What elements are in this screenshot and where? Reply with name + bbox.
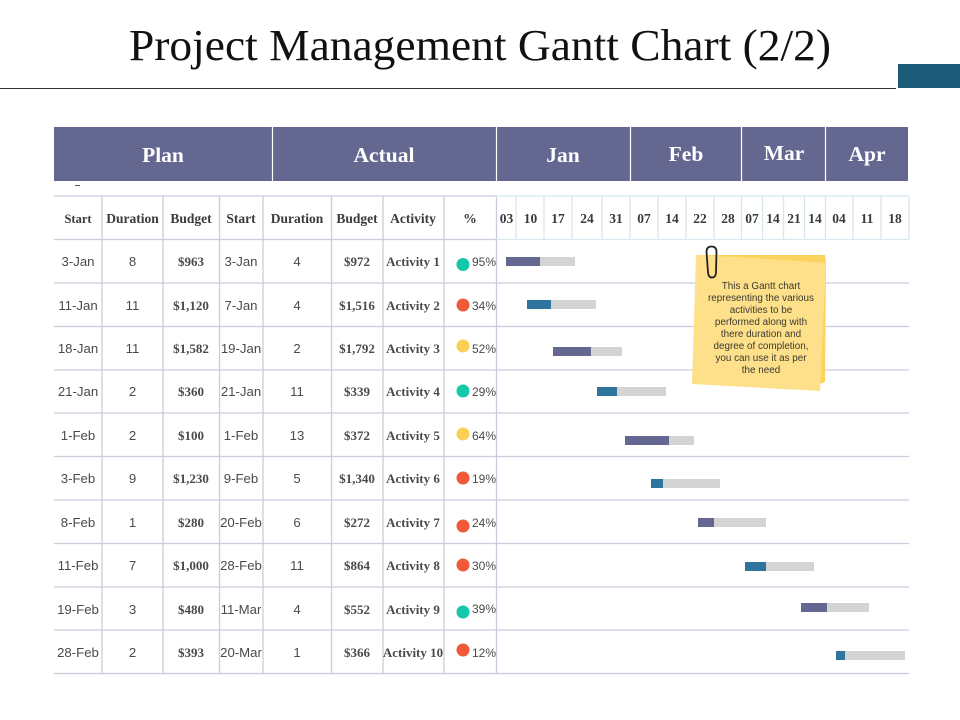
row: Activity 5: Activity 5 (386, 428, 440, 443)
table grid lines (54, 196, 909, 674)
sticky note callout: performed along with (715, 317, 807, 328)
row: Activity 10 (57, 644, 905, 660)
table header band: Actual (354, 143, 414, 167)
sticky note callout: representing the various (708, 293, 814, 304)
row: Activity 8 (58, 558, 814, 573)
row: Activity 9: 39% (472, 602, 496, 616)
row: Activity 2: Activity 2 (386, 298, 440, 313)
row: Activity 10: $366 (344, 645, 370, 660)
row: Activity 9: 19-Feb (57, 602, 99, 617)
row: Activity 9: 11-Mar (221, 602, 262, 617)
row: Activity 9: 4 (293, 602, 301, 617)
column headings: Budget (170, 211, 212, 226)
row: Activity 4: 29% (472, 385, 496, 399)
icon: paper clip (706, 246, 716, 278)
timeline date headings: 24 (580, 211, 594, 226)
timeline date headings: 07 (637, 211, 651, 226)
row: Activity 2: 7-Jan (224, 298, 258, 313)
row: Activity 9 (57, 602, 869, 618)
row: Activity 3: $1,582 (173, 341, 209, 356)
row: Activity 7: 1 (129, 515, 136, 530)
timeline date headings: 14 (665, 211, 679, 226)
row: Activity 8: Activity 8 (386, 558, 440, 573)
timeline date headings: 18 (888, 211, 902, 226)
row: Activity 3: 52% (472, 342, 496, 356)
column headings: % (463, 211, 477, 226)
timeline date headings: 04 (832, 211, 846, 226)
row: Activity 6: Activity 6 (386, 471, 440, 486)
row: Activity 4: 11 (290, 384, 304, 399)
row: Activity 6 (61, 471, 720, 488)
row: Activity 1: Activity 1 (386, 254, 440, 269)
column headings: Duration (106, 211, 159, 226)
row: Activity 8: 11 (290, 558, 304, 573)
sticky note callout: there duration and (721, 329, 801, 340)
row: Activity 3: $1,792 (339, 341, 375, 356)
row: Activity 2: 11 (126, 298, 139, 313)
sticky note callout: degree of completion, (714, 341, 808, 352)
row: Activity 1: 8 (129, 254, 136, 269)
row: Activity 8: 11-Feb (58, 558, 98, 573)
column headings: Activity (390, 211, 436, 226)
title: Project Management Gantt Chart (2/2) (129, 21, 831, 70)
column headings: Start (64, 212, 92, 226)
timeline date headings: 03 (500, 211, 514, 226)
row: Activity 6: 5 (293, 471, 301, 486)
row: Activity 5: 1-Feb (224, 428, 258, 443)
row: Activity 7: Activity 7 (386, 515, 440, 530)
row: Activity 2: $1,120 (173, 298, 209, 313)
row: Activity 4 (58, 384, 666, 399)
row: Activity 9: $552 (344, 602, 370, 617)
row: Activity 5: 1-Feb (61, 428, 95, 443)
column headings: Budget (336, 211, 378, 226)
timeline date headings (500, 211, 902, 226)
row: Activity 10: Activity 10 (383, 645, 443, 660)
row: Activity 10: $393 (178, 645, 204, 660)
row: Activity 10: 12% (472, 646, 496, 660)
row: Activity 1: 3-Jan (62, 254, 94, 269)
row: Activity 4: Activity 4 (386, 384, 440, 399)
timeline date headings: 07 (745, 211, 759, 226)
column headings (64, 211, 477, 226)
sticky note callout: activities to be (730, 305, 793, 316)
row: Activity 2: 4 (293, 298, 301, 313)
row: Activity 1 (62, 254, 575, 271)
column headings: Start (226, 211, 256, 226)
row: Activity 5: 64% (472, 429, 496, 443)
row: Activity 4: $339 (344, 384, 370, 399)
row: Activity 4: $360 (178, 384, 204, 399)
column headings: Duration (271, 211, 324, 226)
row: Activity 3: Activity 3 (386, 341, 440, 356)
table header band: Feb (669, 142, 703, 166)
row: Activity 10: 1 (293, 645, 301, 660)
row: Activity 7: $272 (344, 515, 370, 530)
row: Activity 4: 21-Jan (221, 384, 261, 399)
row: Activity 9: 3 (129, 602, 136, 617)
row: Activity 7: 8-Feb (61, 515, 95, 530)
row: Activity 10: 28-Feb (57, 645, 99, 660)
timeline date headings: 31 (609, 211, 623, 226)
row: Activity 3: 19-Jan (221, 341, 261, 356)
row: Activity 8: 28-Feb (220, 558, 262, 573)
row: Activity 6: 9-Feb (224, 471, 258, 486)
row: Activity 1: $972 (344, 254, 370, 269)
row: Activity 10: 20-Mar (220, 645, 262, 660)
row: Activity 10: 2 (129, 645, 136, 660)
row: Activity 7: $280 (178, 515, 204, 530)
row: Activity 2 (58, 298, 596, 313)
row: Activity 3: 18-Jan (58, 341, 98, 356)
timeline date headings: 21 (787, 211, 801, 226)
sticky note callout: This a Gantt chart (722, 281, 800, 292)
row: Activity 5: $100 (178, 428, 204, 443)
row: Activity 4: 21-Jan (58, 384, 98, 399)
row: Activity 1: 3-Jan (224, 254, 258, 269)
row: Activity 7 (61, 515, 766, 532)
timeline date headings: 14 (766, 211, 780, 226)
timeline date headings: 10 (524, 211, 538, 226)
row: Activity 5: $372 (344, 428, 370, 443)
table header band: Jan (546, 143, 580, 167)
row: Activity 5: 2 (129, 428, 136, 443)
row: Activity 5: 13 (290, 428, 304, 443)
row: Activity 8: $1,000 (173, 558, 209, 573)
table header band (54, 127, 908, 181)
table header band: Apr (848, 142, 886, 166)
timeline date headings: 11 (861, 211, 874, 226)
row: Activity 6: 19% (472, 472, 496, 486)
row: Activity 8: 7 (129, 558, 136, 573)
row: Activity 3 (58, 340, 622, 356)
row: Activity 9: Activity 9 (386, 602, 440, 617)
row: Activity 1: 4 (293, 254, 301, 269)
timeline date headings: 17 (551, 211, 565, 226)
sticky note callout: you can use it as per (715, 353, 807, 364)
row: Activity 6: 9 (129, 471, 136, 486)
corner accent block (898, 64, 960, 88)
row: Activity 2: 34% (472, 299, 496, 313)
table header band: Mar (764, 141, 805, 165)
row: Activity 3: 11 (126, 341, 139, 356)
sticky note callout: the need (742, 365, 780, 376)
row: Activity 6: 3-Feb (61, 471, 95, 486)
row: Activity 3: 2 (293, 341, 301, 356)
row: Activity 1: $963 (178, 254, 204, 269)
row: Activity 1: 95% (472, 255, 496, 269)
row: Activity 8: $864 (344, 558, 370, 573)
row: Activity 6: $1,230 (173, 471, 209, 486)
row: Activity 7: 24% (472, 516, 496, 530)
timeline date headings: 14 (808, 211, 822, 226)
table header band: Plan (142, 143, 184, 167)
row: Activity 9: $480 (178, 602, 204, 617)
row: Activity 5 (61, 428, 694, 445)
row: Activity 7: 6 (293, 515, 301, 530)
timeline date headings: 22 (693, 211, 707, 226)
row: Activity 7: 20-Feb (220, 515, 262, 530)
row: Activity 2: 11-Jan (58, 298, 98, 313)
row: Activity 2: $1,516 (339, 298, 375, 313)
row: Activity 6: $1,340 (339, 471, 375, 486)
timeline date headings: 28 (721, 211, 735, 226)
row: Activity 4: 2 (129, 384, 136, 399)
row: Activity 8: 30% (472, 559, 496, 573)
sticky note callout (692, 255, 826, 391)
